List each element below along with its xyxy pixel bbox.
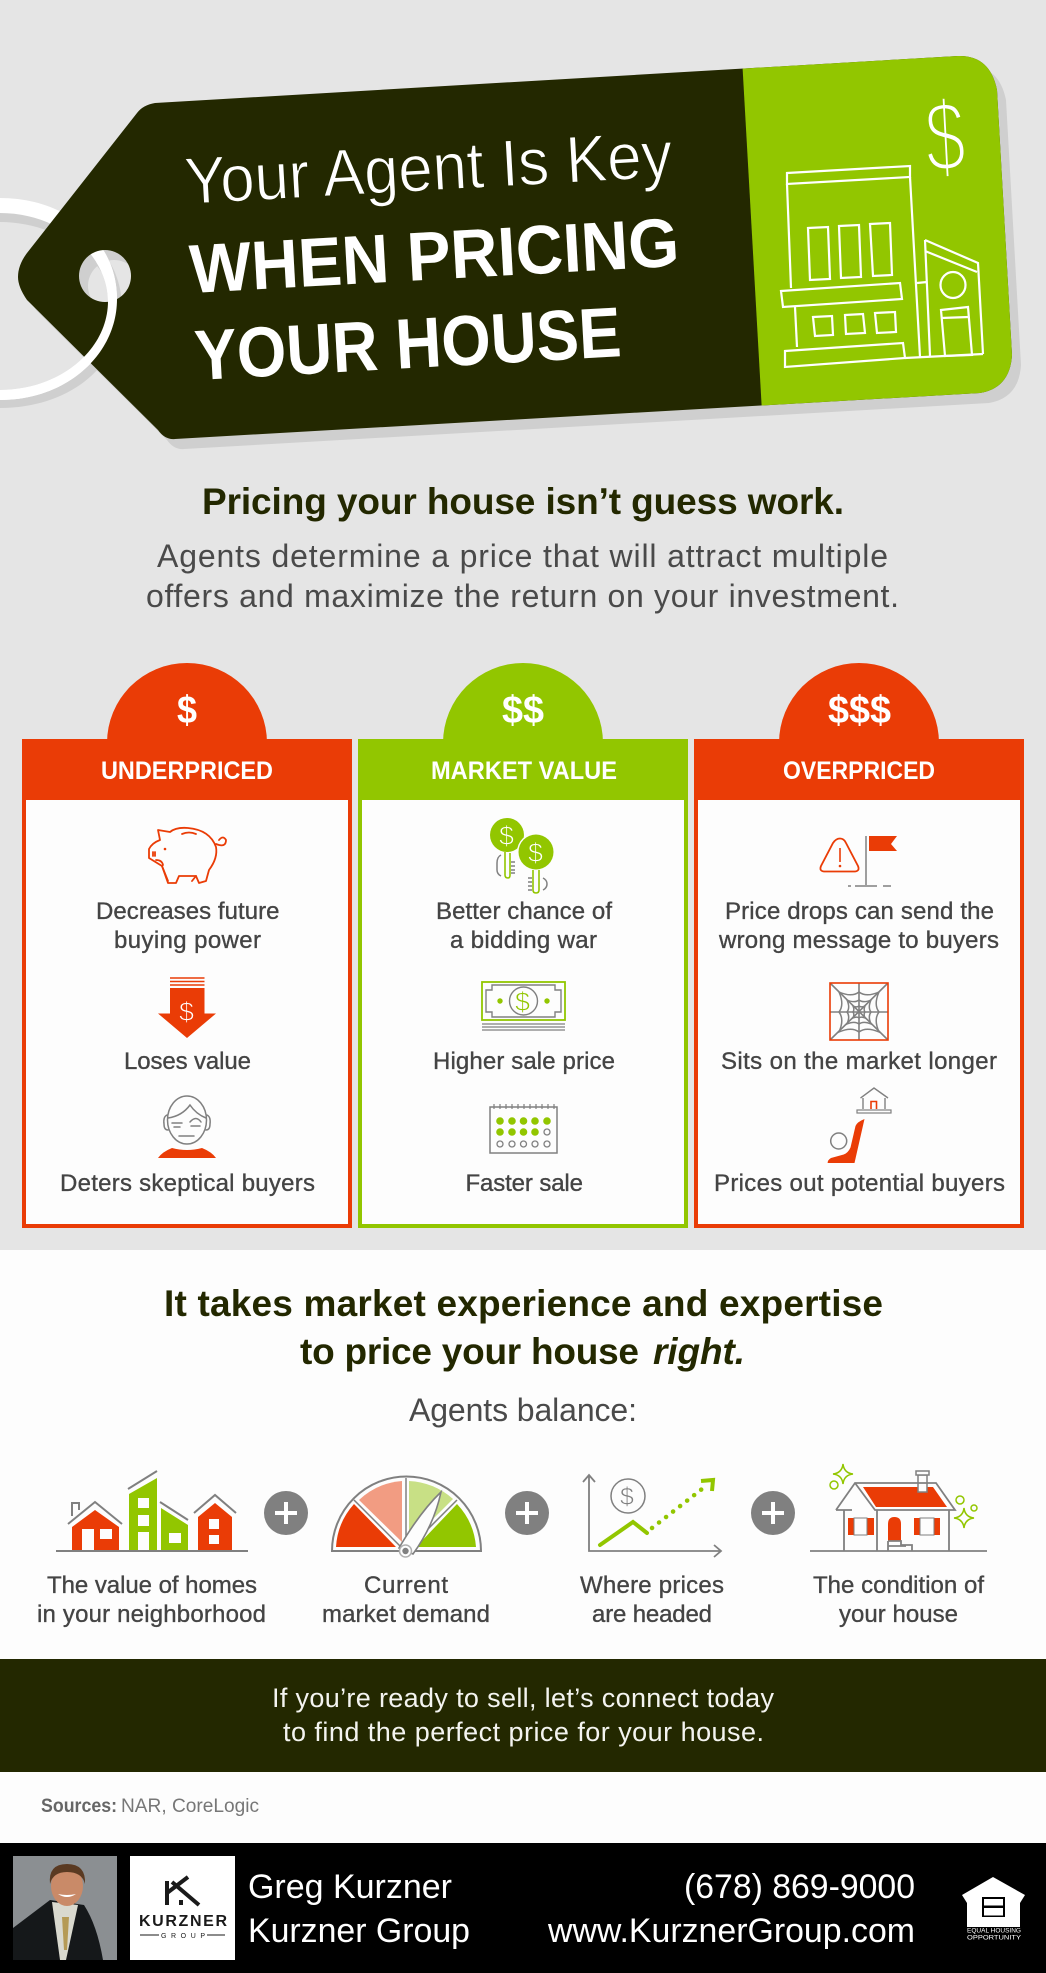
icon: bidding paddles xyxy=(490,818,555,893)
factor labels: your house xyxy=(839,1601,958,1628)
icon: down arrow with dollar: $ xyxy=(179,997,194,1027)
icon: down arrow with dollar xyxy=(158,978,216,1038)
intro paragraph xyxy=(146,538,899,614)
icon: bidding paddles: $ xyxy=(528,838,543,868)
plus sign xyxy=(264,1491,308,1535)
icon: building with dollar sign: $ xyxy=(922,80,968,194)
contact details: www.KurznerGroup.com xyxy=(547,1912,915,1950)
panel: overpriced: wrong message to buyers xyxy=(718,927,999,954)
call to action banner: to find the perfect price for your house. xyxy=(283,1717,764,1747)
call to action banner xyxy=(0,1659,1046,1772)
panel: underpriced: buying power xyxy=(114,927,261,954)
title: Your Agent Is Key xyxy=(183,117,674,218)
panel: market expertise: Agents balance: xyxy=(409,1392,637,1428)
panel: market value: Higher sale price xyxy=(433,1048,615,1075)
panel: underpriced: Decreases future xyxy=(96,898,280,925)
panel: overpriced: Prices out potential buyers xyxy=(714,1170,1005,1197)
agent name: Kurzner Group xyxy=(248,1912,470,1950)
factor labels: The value of homes xyxy=(47,1572,257,1599)
icon: house in good condition xyxy=(810,1464,987,1551)
company logo xyxy=(130,1856,235,1960)
contact details xyxy=(547,1868,915,1950)
panel: overpriced: OVERPRICED xyxy=(783,757,935,785)
subheading: Pricing your house isn’t guess work. xyxy=(202,481,844,522)
factor labels: in your neighborhood xyxy=(37,1601,266,1628)
call to action banner: If you’re ready to sell, let’s connect today xyxy=(272,1683,774,1713)
subheading xyxy=(146,481,899,614)
factor labels: market demand xyxy=(322,1601,490,1628)
icon: dollar bill xyxy=(482,982,565,1030)
factor labels: Current xyxy=(364,1572,448,1599)
sources: NAR, CoreLogic xyxy=(121,1796,259,1817)
panel: underpriced: UNDERPRICED xyxy=(101,757,273,785)
agent name xyxy=(248,1868,470,1950)
panel: overpriced: $$$ xyxy=(828,689,891,732)
panel: market value: $$ xyxy=(502,689,544,732)
panel: market expertise xyxy=(0,1250,1046,1659)
intro paragraph: offers and maximize the return on your investment. xyxy=(146,578,899,614)
panel: overpriced: Price drops can send the xyxy=(725,898,994,925)
agent footer xyxy=(0,1843,1046,1973)
company logo: GROUP xyxy=(161,1933,205,1940)
icon: equal housing opportunity xyxy=(962,1877,1025,1942)
contact details: (678) 869-9000 xyxy=(684,1868,915,1906)
panel: market value: Better chance of xyxy=(436,898,612,925)
icon: neighborhood homes xyxy=(56,1471,248,1551)
panel: market value: MARKET VALUE xyxy=(431,757,617,785)
heading: to price your house xyxy=(300,1331,639,1372)
agent name: Greg Kurzner xyxy=(248,1868,452,1906)
factor labels xyxy=(37,1572,984,1628)
panel: market value xyxy=(358,663,688,1228)
title: WHEN PRICING xyxy=(188,204,681,308)
intro paragraph: Agents determine a price that will attract multiple xyxy=(157,538,888,574)
icon: piggy bank xyxy=(149,828,226,883)
icon: price trend chart xyxy=(583,1475,721,1557)
agent photo xyxy=(13,1856,117,1960)
panel: underpriced: $ xyxy=(177,689,197,732)
plus sign xyxy=(751,1491,795,1535)
heading: right. xyxy=(653,1331,745,1372)
plus sign xyxy=(505,1491,549,1535)
panel: overpriced xyxy=(694,663,1024,1228)
icon: spider web xyxy=(830,983,888,1040)
sources: Sources: xyxy=(41,1796,117,1817)
panel: market value: Faster sale xyxy=(466,1170,583,1197)
icon: building with dollar sign xyxy=(781,80,983,367)
price tag banner xyxy=(0,56,1021,449)
heading: It takes market experience and expertise xyxy=(164,1283,883,1324)
factor labels: Where prices xyxy=(580,1572,724,1599)
heading xyxy=(164,1283,883,1372)
icon: calendar xyxy=(490,1104,557,1153)
title xyxy=(183,117,681,396)
panel: underpriced xyxy=(22,663,352,1228)
panel: underpriced: Deters skeptical buyers xyxy=(60,1170,315,1197)
icon: dollar bill: $ xyxy=(515,987,530,1017)
icon: warning and red flag xyxy=(820,836,897,886)
icon: equal housing opportunity: EQUAL HOUSING xyxy=(967,1928,1021,1934)
panel: market value: a bidding war xyxy=(450,927,597,954)
company logo: KURZNER xyxy=(139,1913,227,1930)
title: YOUR HOUSE xyxy=(192,293,623,396)
icon: seat and house xyxy=(828,1088,891,1163)
icon: price trend chart: $ xyxy=(620,1483,634,1511)
icon: bidding paddles: $ xyxy=(499,821,514,851)
factor labels: The condition of xyxy=(813,1572,984,1599)
panel: overpriced: Sits on the market longer xyxy=(721,1048,997,1075)
sources xyxy=(0,1772,1046,1843)
icon: equal housing opportunity: OPPORTUNITY xyxy=(967,1934,1022,1942)
factor labels: are headed xyxy=(592,1601,712,1628)
icon: demand gauge xyxy=(332,1476,481,1557)
icon: skeptical face xyxy=(158,1096,216,1158)
panel: underpriced: Loses value xyxy=(124,1048,251,1075)
